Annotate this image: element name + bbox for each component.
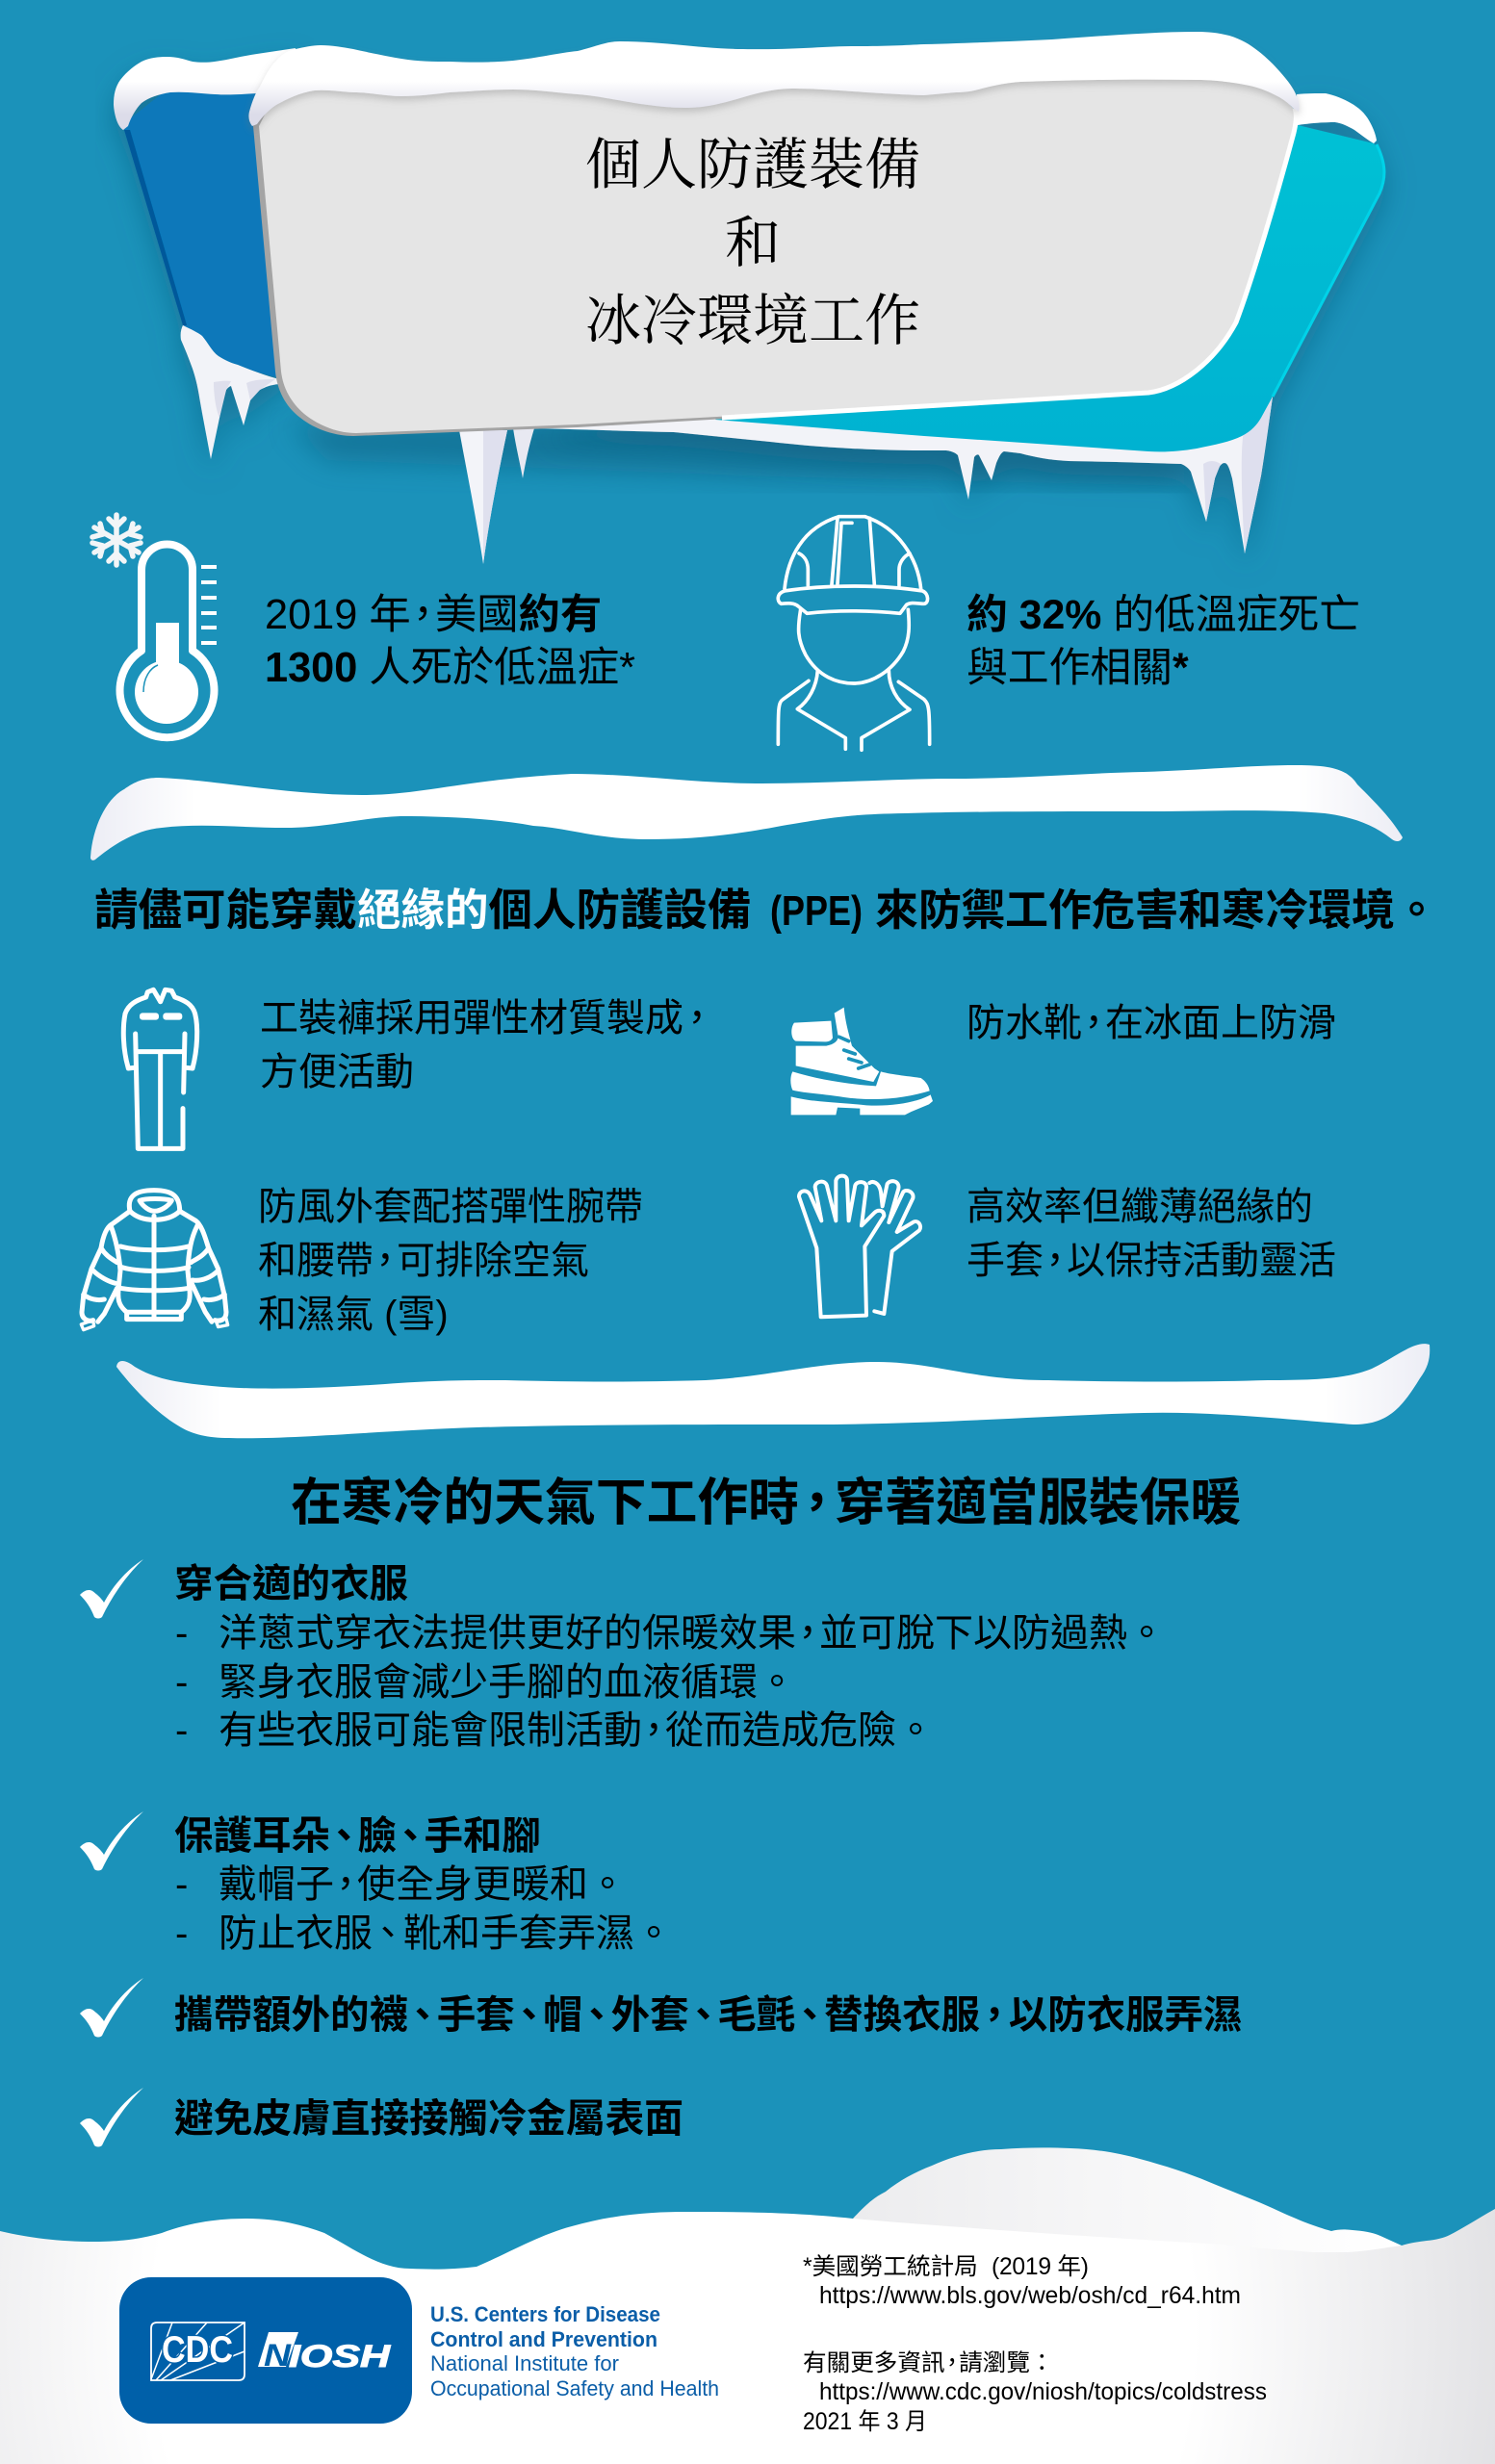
icon: NIOSH logotype — [258, 2332, 391, 2374]
gloves text: 高效率但纖薄絕緣的 — [967, 1186, 1313, 1228]
coverall text — [260, 997, 716, 1093]
check item: proper clothing: 穿合適的衣服 — [174, 1561, 408, 1605]
icon: waterproof boot — [790, 1008, 933, 1115]
teal back card with snow and icicles — [534, 93, 1385, 553]
agency name text: U.S. Centers for Disease — [430, 2302, 660, 2326]
check item: protect extremities: 戴帽子，使全身更暖和。 — [219, 1863, 627, 1906]
stat text: deaths: 1300 人死於低溫症* — [265, 645, 635, 691]
check item: protect extremities: - — [175, 1912, 188, 1955]
references text: *美國勞工統計局 — [803, 2253, 978, 2280]
check item: protect extremities: - — [175, 1863, 188, 1906]
agency name text: Control and Prevention — [430, 2327, 657, 2351]
check item: avoid metal: 避免皮膚直接接觸冷金屬表面 — [174, 2096, 683, 2141]
snow divider 1 — [90, 765, 1403, 860]
check item: proper clothing: - — [175, 1709, 188, 1752]
icon: coverall — [123, 989, 197, 1148]
jacket text: 和腰帶，可排除空氣 — [258, 1240, 589, 1282]
agency name text: National Institute for — [430, 2351, 619, 2375]
check item: proper clothing: 有些衣服可能會限制活動，從而造成危險。 — [219, 1709, 935, 1752]
PPE heading: 請儘可能穿戴絕緣的個人防護設備 — [94, 886, 752, 935]
agency name text — [430, 2302, 719, 2400]
references text: (2019 年) — [992, 2253, 1089, 2280]
jacket text: 和濕氣 (雪) — [258, 1294, 449, 1336]
references text: https://www.cdc.gov/niosh/topics/coldstress — [819, 2379, 1267, 2405]
references text — [803, 2253, 1267, 2435]
stat text: deaths: 2019 年，美國約有 — [265, 592, 602, 638]
gloves text: 手套，以保持活動靈活 — [967, 1240, 1336, 1282]
title text: 個人防護裝備 — [585, 134, 920, 196]
boot text: 防水靴，在冰面上防滑 — [967, 1002, 1336, 1044]
check item: proper clothing — [80, 1559, 1166, 1752]
title banner — [114, 32, 1385, 564]
agency name text: Occupational Safety and Health — [430, 2376, 719, 2400]
blue back card with snow and icicles — [114, 48, 296, 459]
icon: gloves — [799, 1176, 920, 1317]
PPE heading: (PPE) — [770, 887, 863, 935]
icon: CDC logo — [151, 2323, 245, 2380]
icon: worker with hard hat — [778, 517, 930, 750]
check item: protect extremities: 防止衣服、靴和手套弄濕。 — [219, 1912, 673, 1955]
middle icicles — [459, 428, 534, 564]
title text — [585, 134, 920, 352]
title text: 和 — [725, 212, 781, 274]
stat text: work related: 約 32% 的低溫症死亡 — [967, 592, 1360, 638]
references text: https://www.bls.gov/web/osh/cd_r64.htm — [819, 2283, 1241, 2309]
icon: NIOSH logotype: N — [264, 2338, 292, 2373]
snow divider 2 — [116, 1344, 1430, 1438]
footer snow — [0, 2147, 1495, 2464]
jacket text: 防風外套配搭彈性腕帶 — [258, 1186, 643, 1228]
stat text: work related: 與工作相關* — [967, 645, 1189, 691]
references text: 2021 年 3 月 — [803, 2408, 927, 2435]
coverall text: 工裝褲採用彈性材質製成， — [260, 997, 716, 1040]
clothing heading: 在寒冷的天氣下工作時，穿著適當服裝保暖 — [291, 1475, 1241, 1531]
check item: carry extras: 攜帶額外的襪、手套、帽、外套、毛氈、替換衣服，以防衣服弄濕 — [174, 1992, 1243, 2037]
gloves text — [967, 1186, 1336, 1282]
icon: NIOSH logotype: IOSH — [289, 2339, 391, 2374]
references text: 有關更多資訊，請瀏覽： — [803, 2349, 1054, 2376]
stat text: deaths — [265, 592, 635, 691]
PPE heading — [94, 886, 1438, 935]
icon: puffer jacket — [81, 1191, 228, 1330]
check item: avoid metal — [80, 2088, 683, 2146]
logo badge: CDC NIOSH — [117, 2275, 414, 2426]
check item: protect extremities: 保護耳朵、臉、手和腳 — [174, 1813, 541, 1858]
PPE heading: 來防禦工作危害和寒冷環境。 — [875, 886, 1438, 935]
check item: proper clothing: - — [175, 1661, 188, 1704]
icon: thermometer with snowflake — [92, 515, 217, 737]
check item: carry extras — [80, 1978, 1243, 2037]
check item: protect extremities — [80, 1811, 673, 1955]
check item: proper clothing: - — [175, 1612, 188, 1655]
jacket text — [258, 1186, 643, 1336]
check item: proper clothing: 緊身衣服會減少手腳的血液循環。 — [219, 1661, 796, 1704]
check item: proper clothing: 洋蔥式穿衣法提供更好的保暖效果，並可脫下以防過熱。 — [219, 1612, 1166, 1655]
coverall text: 方便活動 — [260, 1051, 414, 1093]
stat text: work related — [967, 592, 1360, 691]
checklist — [80, 1559, 1243, 2146]
icon: CDC logo: CDC — [162, 2329, 233, 2371]
snow cap on title card — [248, 32, 1300, 126]
title text: 冰冷環境工作 — [585, 290, 920, 352]
grey title card — [253, 67, 1296, 436]
